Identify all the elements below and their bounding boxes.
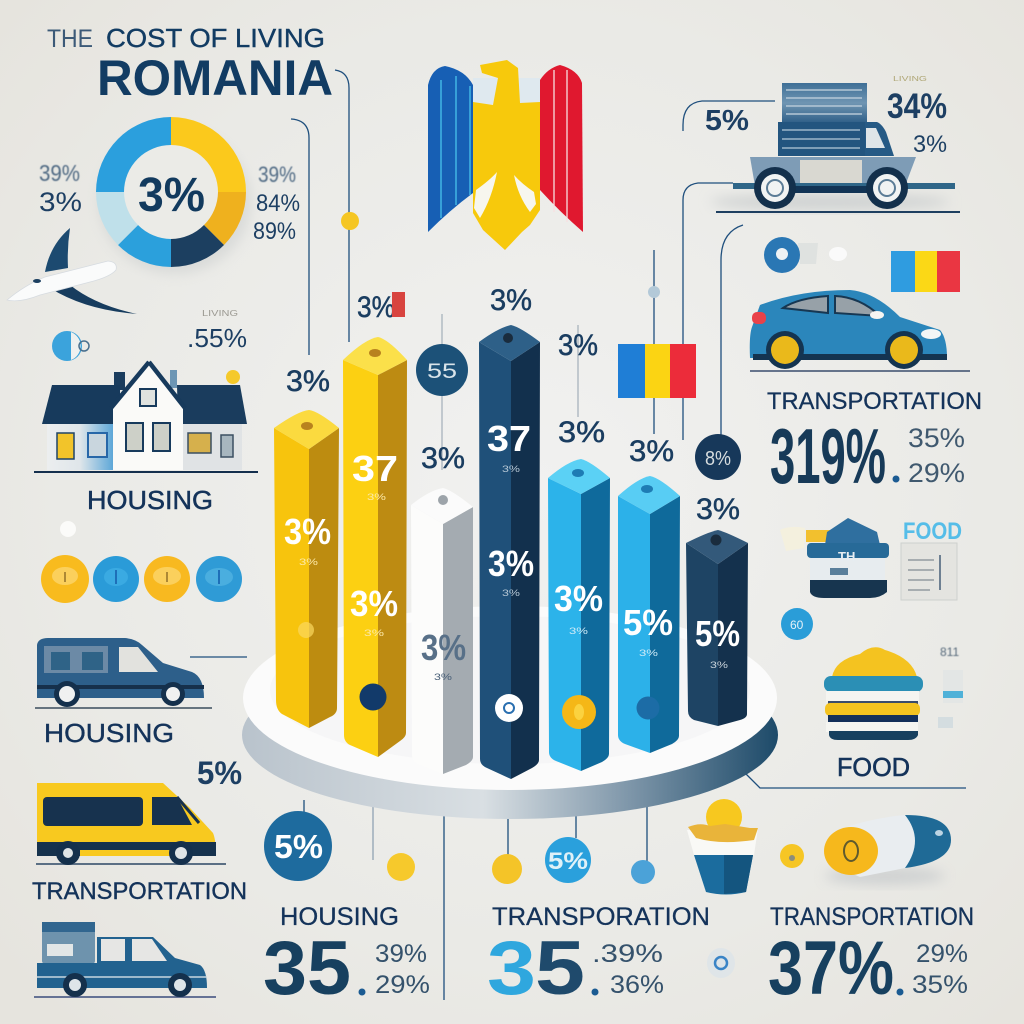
bar 5: sky blue: 3% [569,626,588,636]
bar 3: white: 3% [434,672,452,682]
bar labels above: 3% [558,416,605,449]
donut right values: 39% [258,162,296,187]
badge: 5% large: 5% [274,828,323,865]
bar labels above: 3% [421,442,465,475]
badge: 55 [416,344,468,396]
value: 55%: LIVING [202,309,238,318]
panel: bottom transportation center: 3 [487,926,536,1011]
panel: bottom transportation center: 36% [610,971,664,999]
bar 5: sky blue [548,459,610,771]
badge: 5% large [264,811,332,881]
blue dot [631,860,655,884]
marker dot [341,212,359,230]
marker dot light [648,286,660,298]
bar 4: navy [479,325,540,779]
small marker blue: 60 [790,618,804,632]
badge: 5% small [545,837,591,883]
panel: bottom transportation right: 37% [768,926,894,1011]
coin dot [387,853,415,881]
value: 34%: LIVING [893,76,927,83]
title: ROMANIA [97,50,333,106]
panel: transportation right: 29% [908,458,965,488]
label: housing: HOUSING [87,485,213,515]
bar 4: navy: 37 [487,418,531,459]
bar labels above: 3% [357,291,395,324]
small flag right [891,251,960,292]
bar 3: white: 3% [421,627,466,668]
donut chart [96,117,251,274]
icon: yellow van [36,783,226,865]
bar labels above: 3% [558,329,598,362]
icon: blue van [35,638,212,708]
bar 1: yellow: 3% [299,557,318,567]
badge: 8% [695,434,741,480]
badge: 8%: 8% [705,448,731,470]
panel: bottom transportation right: 35% [912,971,968,999]
panel: bottom transportation center [487,903,710,1011]
bar 7: dark navy [686,530,748,726]
panel: bottom housing: HOUSING [280,903,399,931]
panel: transportation right: 319% [770,412,886,500]
panel: bottom transportation right: TRANSPORTATION [770,903,974,931]
panel: bottom transportation center: TRANSPORATION [492,903,710,931]
bar 1: yellow: 3% [284,511,331,552]
title: COST OF LIVING [106,23,325,53]
donut right values: 89% [253,218,296,245]
small red flag tag [392,292,405,317]
value: 55% [187,309,247,353]
coin dot 3 [780,844,804,868]
panel: bottom housing: 35 [263,926,351,1011]
label: food: FOOD [837,752,910,782]
bar 2: yellow tall [343,337,407,757]
bar 7: dark navy: 5% [695,613,740,654]
icon: small ring [707,948,735,978]
donut left values [39,160,82,217]
icon: house [34,362,258,472]
badge: 5% small: 5% [548,848,588,875]
bar 2: yellow tall: 37 [352,448,398,489]
bar 2: yellow tall: 3% [364,628,384,638]
badge: 55: 55 [427,360,457,383]
donut left values: 39% [39,160,80,186]
icon: blue marker [52,331,89,361]
coin dot 2 [492,854,522,884]
side tube detail: 811 [940,645,959,659]
label: food faint [901,518,962,600]
romanian flag center [618,344,696,398]
icon: plane [7,228,137,314]
icon: top truck [710,83,960,212]
label: transportation left: TRANSPORTATION [32,878,247,905]
bar 4: navy: 3% [488,543,534,584]
bar labels above: 3% [286,365,330,398]
bar 6: sky blue [618,476,680,753]
title [47,23,333,106]
donut right values [253,162,300,245]
donut left values: 3% [39,187,82,217]
value: 5% top right: 5% [705,105,749,137]
icon: blue truck [34,922,216,997]
bar 4: navy: 3% [502,588,520,598]
bar 4: navy: 3% [502,464,520,474]
side tube detail [938,645,963,728]
coin row [41,521,242,603]
panel: bottom transportation center: 5 [535,926,585,1011]
donut chart: 3% [138,169,205,222]
bar labels above: 3% [490,284,532,317]
value: 34%: 34% [887,87,947,126]
value: 55%: .55% [187,323,247,353]
icon: food basket: TH [838,549,855,564]
bar 5: sky blue: 3% [554,578,603,619]
icon: food basket [780,518,889,598]
panel: transportation right: TRANSPORTATION [767,388,982,415]
icon: blue marker with blobs [764,237,847,273]
label: housing 2: HOUSING [44,718,174,748]
small marker blue [781,608,813,640]
icon: cup with coin [687,799,758,894]
bar 3: white [411,488,473,774]
panel: bottom transportation center: .39% [592,940,663,968]
panel: transportation right: 35% [908,423,965,453]
panel: bottom housing: 39% [375,940,427,968]
bar labels above: 3% [696,493,740,526]
bar 7: dark navy: 3% [710,660,728,670]
value: 5%: 5% [197,755,242,791]
donut right values: 84% [256,190,300,217]
panel: bottom housing: 29% [375,971,430,999]
panel: bottom housing [263,903,430,1011]
icon: food stack [824,647,923,740]
bar 2: yellow tall: 3% [367,492,386,502]
bar labels above [286,284,740,526]
bar labels above: 3% [629,435,674,468]
icon: blue car [750,290,970,371]
icon: romanian emblem [428,60,583,250]
bar 2: yellow tall: 3% [350,583,398,624]
bar 6: sky blue: 5% [623,602,673,643]
platform [242,606,778,819]
value: 34%: 3% [913,131,947,158]
panel: bottom transportation right [768,903,974,1011]
title: THE [47,25,93,53]
bar 1: yellow [274,410,339,728]
icon: capsule [824,815,951,885]
panel: bottom transportation right: 29% [916,940,968,968]
bar 6: sky blue: 3% [639,648,658,658]
label: food faint: FOOD [903,518,962,545]
value: 34% [887,76,947,158]
